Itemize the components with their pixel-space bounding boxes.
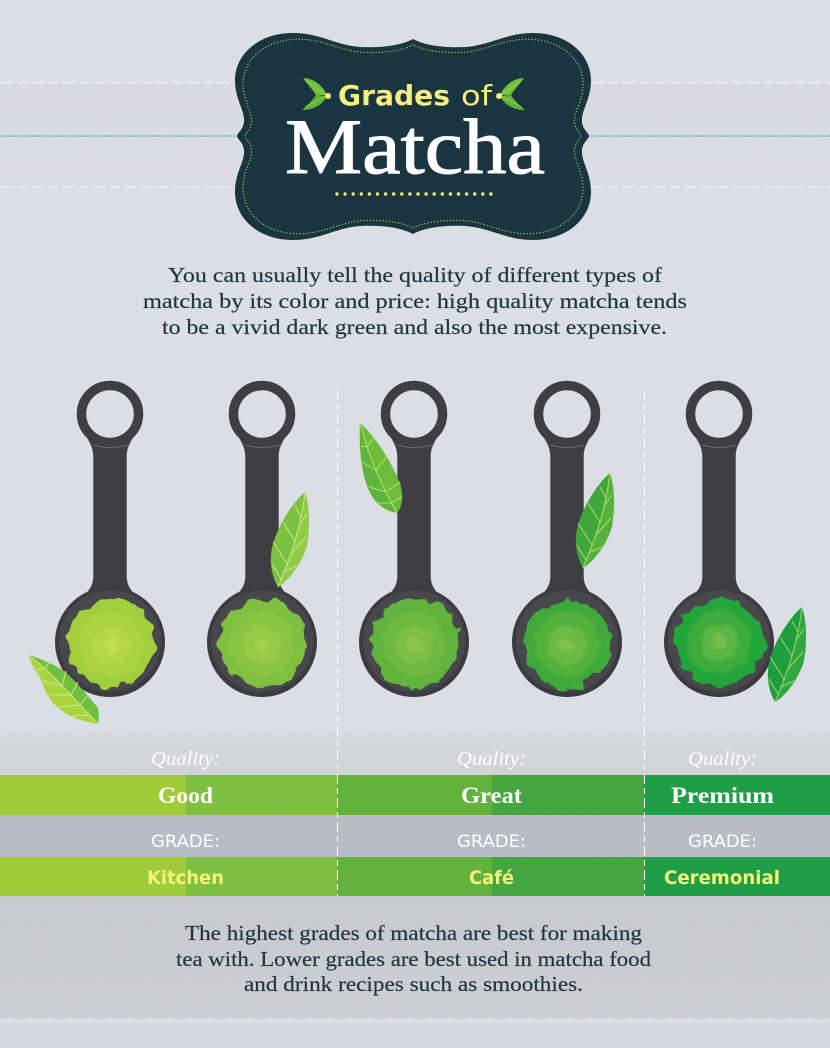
quality labels: Quality: [688,748,757,770]
intro text [143,263,687,339]
grade labels [151,832,757,852]
leaf 5 [768,607,806,702]
grade values: Kitchen [147,867,224,889]
dotted rule [337,192,491,196]
leaf 1 [28,655,99,724]
spoon 3 with powder [359,386,469,697]
heading: Grades of: of [461,79,493,112]
closing text: tea with. Lower grades are best used in matcha food [176,947,652,971]
leaf 2 [271,492,309,587]
band: grade [0,815,830,857]
quality values: Premium [671,783,774,808]
spoon 4 with powder [512,386,622,697]
powder 5 [675,598,763,686]
spoon 1 with kitchen-grade powder [28,386,165,724]
grade values: Café [469,867,514,889]
header band [0,83,830,350]
intro text: matcha by its color and price: high quality matcha tends [143,289,687,313]
closing text: The highest grades of matcha are best for making [185,921,643,945]
heading: Grades of: Grades [338,79,450,112]
quality values: Great [461,783,522,808]
icon: right leaves [496,78,525,110]
grade values: Ceremonial [664,867,780,889]
closing text: and drink recipes such as smoothies. [244,972,583,996]
quality colour bar [0,775,830,815]
column dividers [338,390,644,896]
leaf 4 [576,473,614,568]
grade values [147,867,780,889]
spoon 2 with powder [207,386,317,697]
intro text: to be a vivid dark green and also the most expensive. [162,315,667,339]
spoon 5 with powder [664,386,806,702]
quality labels: Quality: [457,748,526,770]
quality values: Good [158,783,213,808]
band: closing [0,896,830,1048]
powder 4 [523,600,611,688]
leaf 3 [360,423,402,513]
grade labels: GRADE: [688,832,757,852]
quality labels [151,748,757,770]
grade labels: GRADE: [457,832,526,852]
heading: Matcha: Matcha [285,103,545,190]
grade colour bar [0,857,830,896]
powder 2 [218,599,306,687]
powder 3 [371,599,459,687]
powder 1 [67,599,155,687]
grade labels: GRADE: [151,832,220,852]
title badge [235,33,591,240]
quality values [158,783,774,808]
closing text [176,921,652,996]
icon: left leaves [302,78,331,110]
quality labels: Quality: [151,748,220,770]
intro text: You can usually tell the quality of different types of [168,263,662,287]
band: quality [0,732,830,776]
